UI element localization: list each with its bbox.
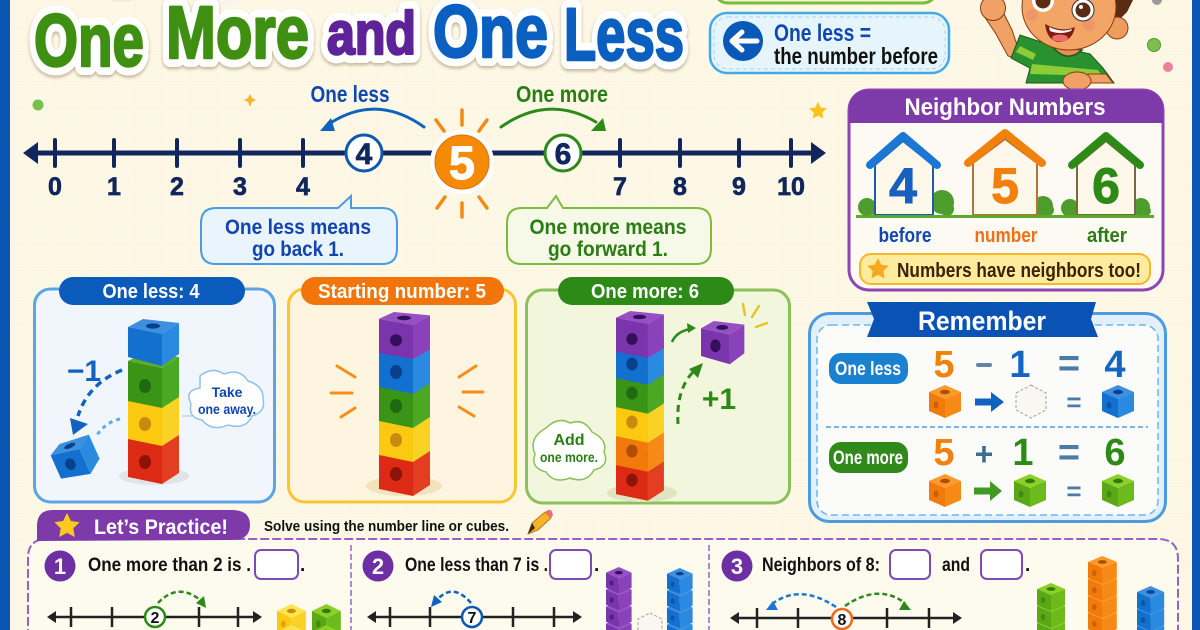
mini number line: [47, 592, 262, 627]
dashed green arrow: [678, 363, 703, 424]
number line: 2: [170, 173, 184, 201]
callout: one less: go back 1.: [252, 238, 344, 261]
small green arrow: [672, 323, 696, 342]
row: one more equation: 5: [933, 432, 955, 474]
number line: 1: [107, 173, 121, 201]
house: before: 4: [889, 158, 917, 214]
number line: 9: [732, 173, 746, 201]
house labels: before: [878, 225, 932, 247]
row: one more equation: =: [1058, 432, 1080, 474]
pill heading: Starting number: 5: [318, 281, 486, 303]
panel: starting number cubes: [288, 277, 516, 502]
mini number line: 2: [151, 610, 160, 627]
mini number line: 8: [838, 612, 847, 629]
row: one more equation: 6: [1104, 432, 1126, 474]
emphasis rays: [331, 366, 483, 417]
row: one more equation: One more: [833, 448, 903, 469]
icon: boy character: [980, 0, 1133, 90]
row: one more equation: =: [1066, 476, 1082, 506]
panel: remember: [810, 302, 1166, 522]
question 3: and: [942, 555, 970, 576]
title: and: [327, 0, 416, 67]
question 2: .: [594, 555, 599, 576]
mini cube stacks: [1037, 556, 1164, 630]
row: one less equation: 4: [1104, 344, 1126, 386]
question 3: [722, 550, 1164, 630]
question 1: .: [300, 555, 305, 576]
plus one label: +1: [702, 383, 736, 416]
panel: neighbor numbers: [849, 90, 1163, 290]
cube stack of four: [128, 319, 179, 484]
cube stack of six: [616, 311, 664, 501]
thought bubble: one more.: [540, 449, 598, 465]
panel: one more cubes: [526, 277, 790, 503]
thought bubble: one away.: [198, 402, 256, 417]
row: one less equation: [829, 343, 1134, 418]
mini cubes: [277, 604, 341, 630]
row: one less equation: 5: [933, 344, 955, 386]
question 2: [362, 550, 693, 630]
row: one less equation: =: [1066, 387, 1082, 417]
panel heading: [849, 90, 1163, 123]
panel: one more definition box (cropped): [714, 0, 937, 3]
mini number line: [730, 594, 962, 629]
row: one less equation: 1: [1009, 344, 1031, 386]
mini cube stacks: [606, 567, 693, 630]
question 3: 3: [731, 554, 743, 579]
title: [34, 0, 684, 82]
callout: one more: [507, 196, 711, 264]
number line: [23, 110, 826, 217]
number 4 marker: 4: [356, 138, 373, 171]
banner heading: [867, 302, 1098, 337]
house labels: [878, 225, 1127, 247]
panel: one less cubes: [34, 277, 274, 502]
number line: 3: [233, 173, 247, 201]
number 6 marker: 6: [555, 138, 571, 171]
house labels: number: [974, 225, 1038, 247]
decorative dots and stars: [32, 0, 1173, 119]
panel: one less definition: [710, 13, 949, 73]
callout: one less: [201, 196, 397, 264]
arrow: one more: [501, 81, 608, 131]
house: after: [1072, 136, 1140, 215]
question 2: 2: [372, 554, 384, 579]
house: number: [968, 133, 1042, 215]
row: one less equation: =: [1058, 343, 1080, 385]
callout: neighbors: [860, 254, 1150, 284]
callout: one more: go forward 1.: [548, 238, 668, 261]
row: one more equation: [829, 432, 1134, 507]
callout: neighbors: Numbers have neighbors too!: [897, 260, 1141, 282]
number line: 0: [48, 173, 62, 201]
removed blue cube: [48, 431, 104, 486]
row: one more equation: +: [975, 436, 993, 472]
title: One: [34, 0, 144, 82]
arrow: one less: [310, 81, 424, 131]
question 3: .: [1025, 555, 1030, 576]
title: and: [327, 0, 416, 67]
panel: one less definition: the number before: [774, 43, 938, 69]
cube stack of five: [379, 312, 430, 496]
instruction: Solve using the number line or cubes.: [264, 518, 509, 535]
arrow: one more: One more: [516, 81, 608, 107]
house labels: after: [1087, 225, 1127, 247]
number 4 marker: [346, 135, 382, 171]
question 1: [44, 550, 341, 630]
panel: practice: [28, 510, 1178, 630]
house: before: [870, 136, 937, 215]
thought bubble: Add: [553, 432, 585, 449]
bushes: [858, 190, 1151, 217]
number line: 7: [613, 173, 627, 201]
thought bubble: Take: [212, 384, 243, 400]
added purple cube: [701, 321, 744, 364]
dashed arrow to removed cube: [70, 370, 122, 435]
title: One: [34, 0, 144, 82]
arrow: one less: One less: [310, 81, 390, 107]
row: one more equation: 1: [1012, 432, 1034, 474]
panel: one less definition: One less =: [774, 20, 871, 47]
pill heading: One less: 4: [102, 281, 200, 303]
number line: 4: [296, 173, 310, 201]
number 5 sun marker: [430, 110, 494, 217]
number line: 10: [777, 173, 805, 201]
thought bubble: [533, 420, 606, 480]
row: one less equation: One less: [835, 359, 901, 380]
callout: one less: One less means: [225, 216, 371, 239]
pill heading: [59, 277, 245, 305]
thought bubble: [182, 370, 264, 428]
mini number line: [367, 592, 582, 627]
number 6 marker: [545, 135, 581, 171]
pill heading: [301, 277, 504, 305]
practice tab: [37, 510, 250, 541]
house: number: 5: [991, 158, 1019, 214]
house: after: 6: [1092, 158, 1120, 214]
minus one label: −1: [67, 355, 101, 388]
question 2: One less than 7 is .: [405, 555, 548, 576]
question 3: Neighbors of 8:: [762, 555, 880, 576]
number line: 8: [673, 173, 687, 201]
number 5 sun marker: 5: [449, 136, 475, 189]
mini number line: 7: [468, 610, 477, 627]
icon: pencil: [528, 510, 553, 534]
banner heading: Remember: [918, 306, 1046, 336]
sparkles: [743, 304, 767, 327]
callout: one more: One more means: [530, 216, 686, 239]
question 1: One more than 2 is .: [88, 555, 251, 576]
icon: back arrow: [723, 21, 763, 61]
question 1: 1: [54, 554, 66, 579]
practice tab: Let’s Practice!: [94, 516, 228, 539]
pill heading: [558, 277, 734, 305]
pill heading: One more: 6: [591, 281, 699, 303]
panel heading: Neighbor Numbers: [904, 94, 1106, 121]
